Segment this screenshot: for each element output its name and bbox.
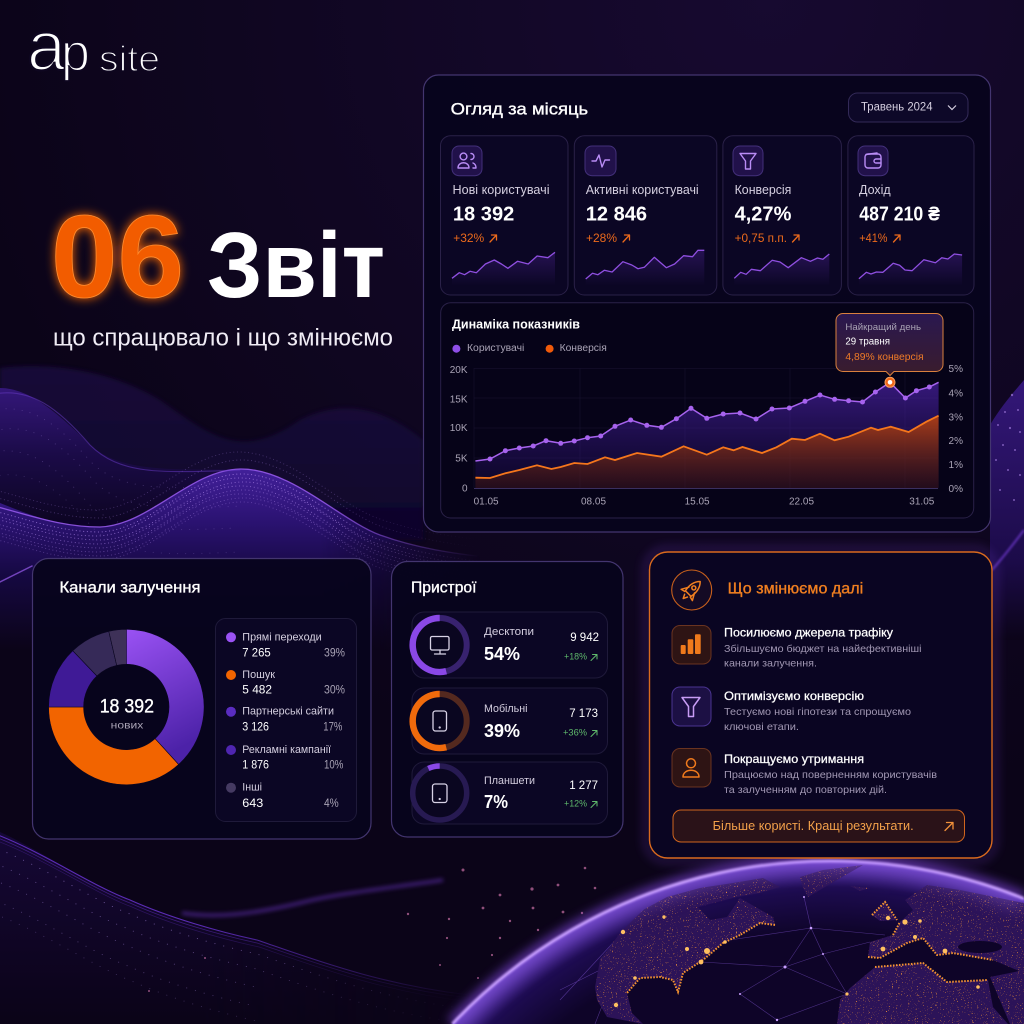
KPI: new users: +32% <box>453 231 485 245</box>
icon: tablet <box>432 784 447 802</box>
wave: bottom left field <box>0 832 278 968</box>
item: traffic: Посилюємо джерела трафіку <box>724 626 893 640</box>
tooltip: 4,89% конверсія <box>845 352 924 363</box>
item: traffic <box>672 626 922 670</box>
call to action: Більше користі. Кращі результати. <box>713 819 914 833</box>
device: tablet: 7% <box>484 792 508 812</box>
pink particles near the globe <box>148 867 596 992</box>
KPI: conversion: Конверсія <box>735 183 791 197</box>
tooltip: Найкращий день <box>845 322 921 333</box>
legend: partners: 3 126 <box>242 721 269 733</box>
globe <box>452 860 1024 1024</box>
chart heading: Динаміка показників <box>452 317 580 331</box>
inner rim haze <box>452 861 1024 1024</box>
network lines <box>560 897 885 1024</box>
KPI: active users <box>574 136 717 295</box>
device: mobile: 7 173 <box>569 708 598 720</box>
right axis labels: 1% <box>949 460 963 471</box>
right axis labels: 4% <box>949 388 963 400</box>
legend: partners: Партнерські сайти <box>242 706 334 718</box>
KPI: new users: 18 392 <box>453 202 514 226</box>
icon: funnel <box>672 687 711 726</box>
globe atmosphere <box>452 861 1024 1024</box>
KPI: new users <box>440 136 568 295</box>
panel: monthly overview <box>424 75 990 532</box>
x axis labels: 15.05 <box>685 496 710 508</box>
donut total: нових <box>111 720 144 732</box>
legend: search: 30% <box>324 685 345 697</box>
legend: search: 5 482 <box>242 685 272 697</box>
conversion line <box>475 416 939 478</box>
rocket icon <box>672 570 712 610</box>
users line <box>475 382 939 462</box>
right axis labels: 0% <box>949 484 963 495</box>
legend: other: Інші <box>242 782 262 794</box>
heading: Канали залучення <box>60 580 200 596</box>
donut total <box>100 696 154 732</box>
KPI: revenue: Дохід <box>859 183 891 197</box>
item: conversion: Тестуємо нові гіпотези та спрощуємо <box>724 706 911 718</box>
KPI: conversion <box>723 136 841 295</box>
wave: particle dots <box>0 452 466 572</box>
left axis labels: 15K <box>450 394 468 406</box>
light streak <box>182 880 443 915</box>
left axis labels <box>450 365 468 494</box>
number 06: 06 <box>51 191 184 322</box>
donut chart <box>49 629 204 785</box>
panel: what changes next <box>646 549 995 861</box>
right axis labels: 2% <box>949 436 963 447</box>
device: desktop: 9 942 <box>570 632 599 644</box>
device: mobile: Мобільні <box>484 703 528 715</box>
KPI: conversion: +0,75 п.п. <box>735 231 787 245</box>
icon: wallet <box>858 146 888 176</box>
icon: phone <box>433 711 446 731</box>
device: mobile: 39% <box>484 721 520 741</box>
item: retention: Покращуємо утримання <box>724 752 864 766</box>
right axis labels: 5% <box>949 364 963 375</box>
wave: bottom left particles <box>1 852 444 1021</box>
icon: funnel <box>733 146 763 176</box>
x axis labels: 08.05 <box>581 496 606 508</box>
left axis labels: 0 <box>462 484 468 494</box>
legend: ads: 10% <box>324 760 343 772</box>
item: retention <box>672 748 937 796</box>
legend: search: Пошук <box>242 669 275 681</box>
globe body <box>452 861 1024 1024</box>
donut total: 18 392 <box>100 696 154 718</box>
globe rim <box>452 861 1024 1024</box>
device: tablet <box>412 762 608 824</box>
device: tablet: Планшети <box>484 775 535 787</box>
wave: bottom left <box>0 832 472 1024</box>
device: desktop: +18% <box>564 652 588 662</box>
right axis labels <box>949 364 963 495</box>
KPI: active users: Активні користувачі <box>586 183 699 197</box>
device: desktop: Десктопи <box>484 626 534 638</box>
left axis labels: 20K <box>450 365 468 376</box>
month dropdown <box>848 93 968 122</box>
item: traffic: Збільшуємо бюджет на найефективніші <box>724 643 922 655</box>
panel: trend chart <box>441 303 974 518</box>
conversion area <box>475 416 939 488</box>
legend: other: 643 <box>242 798 263 810</box>
legend: direct: 7 265 <box>242 648 271 660</box>
icon: pulse <box>585 146 616 176</box>
tooltip <box>836 314 943 376</box>
chart legend: Користувачі <box>467 343 524 354</box>
KPI: conversion: 4,27% <box>735 202 791 226</box>
legend: partners: 17% <box>323 721 342 733</box>
wave: upper particles <box>0 409 244 554</box>
word Звіт: Звіт <box>207 213 385 317</box>
wave: front layer <box>0 469 455 636</box>
device: mobile <box>412 688 608 754</box>
icon: users <box>452 146 482 176</box>
users area <box>475 382 939 488</box>
logo letters ap: a <box>27 7 66 85</box>
left axis labels: 10K <box>450 423 468 434</box>
wave: front group <box>0 452 470 636</box>
wave: bright ridges <box>0 393 520 582</box>
legend: ads: Рекламні кампанії <box>242 744 331 756</box>
subtitle: що спрацювало і що змінюємо <box>53 324 393 352</box>
legend: search <box>226 669 345 697</box>
month dropdown: Травень 2024 <box>861 101 933 113</box>
land masses with city lights <box>452 860 1024 1024</box>
item: conversion <box>672 687 911 733</box>
logo word site: site <box>99 38 160 79</box>
x axis labels: 31.05 <box>909 496 935 508</box>
logo <box>27 7 160 85</box>
KPI: revenue: 487 210 ₴ <box>859 202 940 226</box>
item: retention: Працюємо над поверненням користувачів <box>724 769 937 781</box>
chart legend: Конверсія <box>560 343 607 354</box>
device: desktop <box>412 612 608 678</box>
item: conversion: ключові етапи. <box>724 721 799 733</box>
black sea <box>958 941 1002 953</box>
legend: partners <box>226 706 342 733</box>
wave: bottom left ridge <box>0 832 472 1002</box>
KPI: new users: Нові користувачі <box>452 183 550 197</box>
ocean nodes <box>739 896 824 1021</box>
KPI: revenue: +41% <box>859 231 888 245</box>
icon: monitor <box>430 636 449 654</box>
right axis labels: 3% <box>949 412 963 424</box>
coastlines <box>627 902 993 993</box>
legend: ads <box>226 744 343 772</box>
device: tablet: +12% <box>564 798 588 810</box>
heading: Огляд за місяць <box>451 100 588 118</box>
wave: middle layer <box>0 388 240 520</box>
call to action <box>673 810 964 842</box>
panel: devices <box>392 562 623 837</box>
city lights <box>614 915 980 1007</box>
legend: direct <box>226 631 345 660</box>
heading: Що змінюємо далі <box>728 580 863 598</box>
x axis labels <box>474 496 935 508</box>
wave: back layer <box>0 366 423 540</box>
legend: other: 4% <box>324 798 339 810</box>
best day marker <box>885 377 895 387</box>
icon: person <box>672 748 711 787</box>
logo letters ap <box>27 7 90 85</box>
heading: Пристрої <box>411 580 477 596</box>
device: mobile: +36% <box>563 728 588 738</box>
icon: bars <box>672 626 711 664</box>
legend: ads: 1 876 <box>242 760 269 772</box>
title <box>51 191 393 352</box>
legend: direct: 39% <box>324 648 345 660</box>
x axis labels: 22.05 <box>789 496 814 508</box>
legend: other <box>226 782 339 810</box>
x axis labels: 01.05 <box>474 496 499 508</box>
device: desktop: 54% <box>484 644 520 664</box>
KPI: active users: 12 846 <box>586 202 647 226</box>
logo letters ap: p <box>61 24 90 82</box>
chart legend <box>452 343 607 354</box>
item: conversion: Оптимізуємо конверсію <box>724 689 864 703</box>
item: traffic: канали залучення. <box>724 658 817 670</box>
KPI: active users: +28% <box>586 231 617 245</box>
item: retention: та залученням до повторних дій. <box>724 784 887 796</box>
left axis labels: 5K <box>455 454 468 464</box>
wave: right edge <box>990 380 1024 640</box>
legend <box>216 618 356 822</box>
KPI: revenue <box>848 136 974 295</box>
panel: acquisition channels <box>32 558 371 839</box>
device: tablet: 1 277 <box>569 780 598 792</box>
tooltip: 29 травня <box>845 336 890 348</box>
legend: direct: Прямі переходи <box>242 631 322 643</box>
